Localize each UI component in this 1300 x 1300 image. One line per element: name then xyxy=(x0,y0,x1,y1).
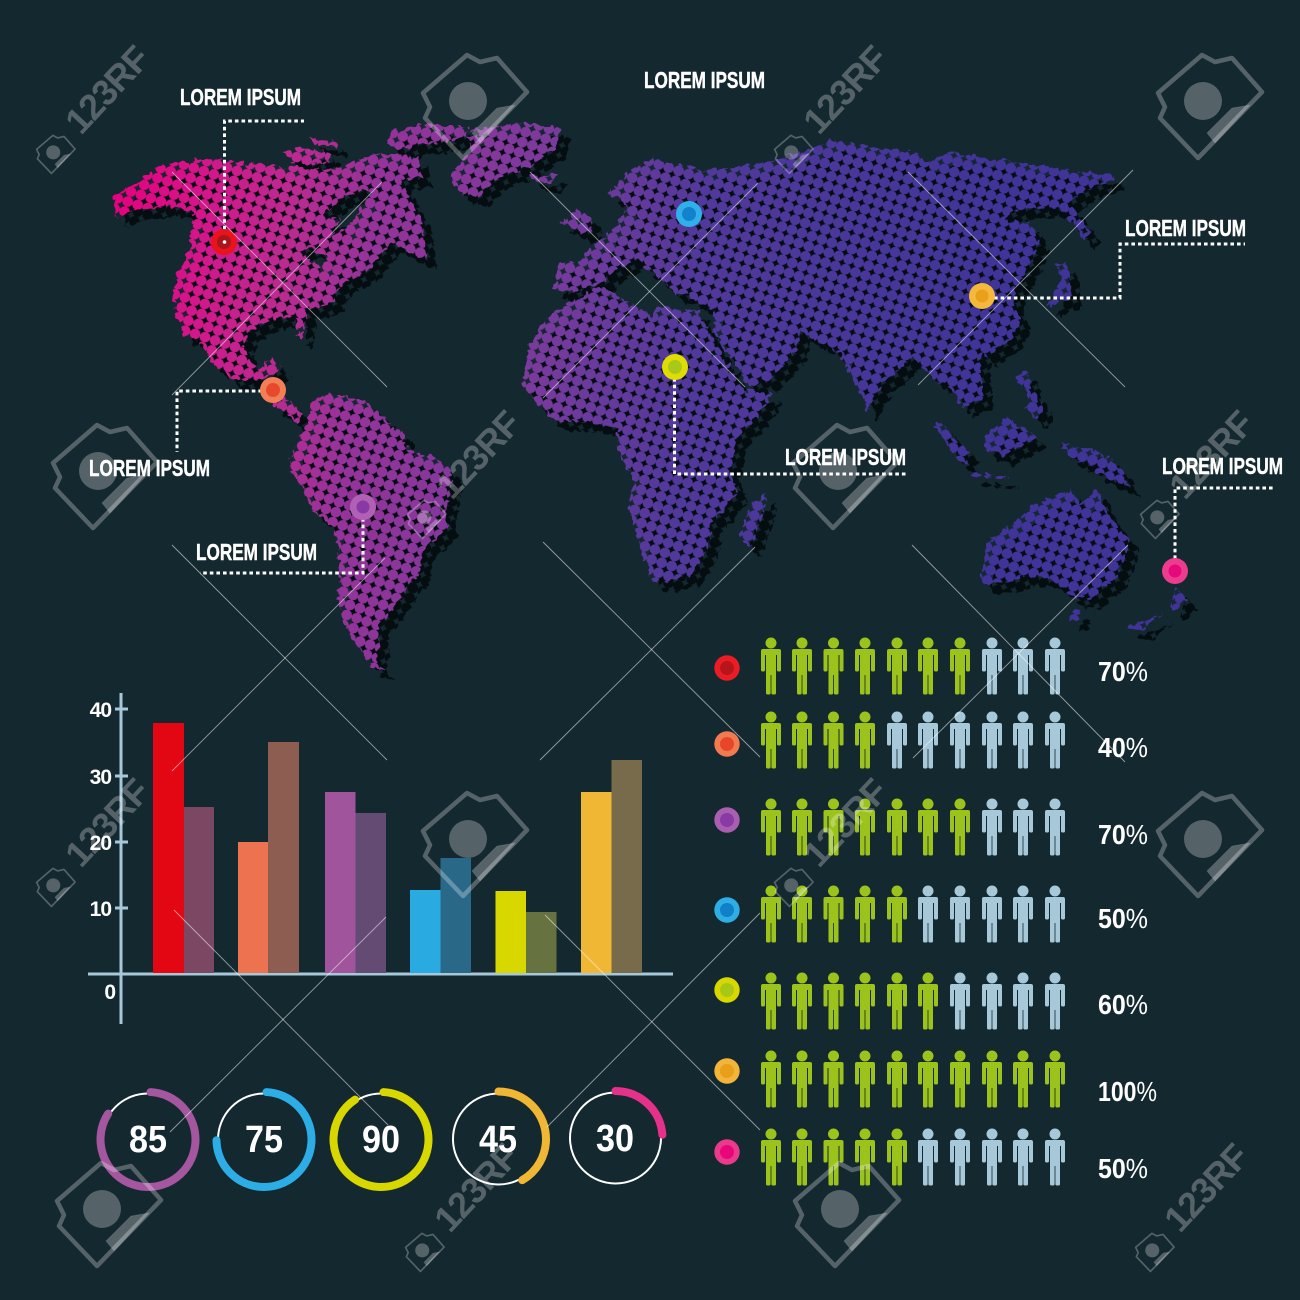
chart axes xyxy=(88,693,673,1024)
people row: red 70% xyxy=(714,638,1148,694)
people row: orange 40%: 40% xyxy=(1098,732,1148,763)
chart axis labels: 40 xyxy=(90,699,111,722)
bars: amber group xyxy=(581,760,642,973)
bars: orange group xyxy=(238,742,299,973)
callout: East Asia xyxy=(969,215,1246,309)
bars: yellow group xyxy=(496,891,556,973)
watermarks: 123RF xyxy=(795,771,895,874)
watermarks: 123RF xyxy=(57,38,157,141)
people row: yellow 60% xyxy=(714,972,1148,1030)
callout: South America xyxy=(196,494,376,573)
donut: 45 xyxy=(451,1092,546,1186)
donut: 45: 45 xyxy=(479,1119,517,1161)
callout: Central America xyxy=(89,377,286,481)
donut: 90: 90 xyxy=(362,1119,400,1161)
bars: blue group xyxy=(410,858,471,973)
bars: red group xyxy=(153,723,214,973)
donut: 90 xyxy=(331,1090,431,1189)
callout: Africa xyxy=(662,354,908,474)
people row: pink 50%: 50% xyxy=(1098,1153,1148,1184)
watermarks: 123RF xyxy=(428,403,528,506)
watermarks: 123RF xyxy=(1156,1136,1256,1239)
people row: blue 50%: 50% xyxy=(1098,903,1148,934)
chart axis labels: 20 xyxy=(90,832,111,855)
watermarks: 123RF xyxy=(57,771,157,874)
people row: red 70%: 70% xyxy=(1098,656,1148,687)
chart axis labels xyxy=(90,699,115,1004)
people row: purple 70% xyxy=(714,798,1148,856)
people row: amber 100%: 100% xyxy=(1098,1076,1157,1107)
chart axis labels: 10 xyxy=(90,898,111,921)
donut: 85: 85 xyxy=(129,1119,167,1161)
chart axis labels: 30 xyxy=(90,766,111,789)
donut: 85 xyxy=(98,1090,198,1189)
callout: Russia xyxy=(644,67,765,227)
callout: South America: LOREM IPSUM xyxy=(196,539,317,565)
callout: Oceania xyxy=(1162,453,1283,584)
donut: 30: 30 xyxy=(596,1118,634,1160)
people row: amber 100% xyxy=(714,1050,1157,1108)
people row: yellow 60%: 60% xyxy=(1098,989,1148,1020)
callout: North America: LOREM IPSUM xyxy=(180,84,301,110)
donut: 75: 75 xyxy=(245,1119,283,1161)
watermarks: 123RF xyxy=(426,1136,526,1239)
people row: purple 70%: 70% xyxy=(1098,819,1148,850)
callout: North America xyxy=(180,84,304,255)
bar chart xyxy=(88,693,673,1024)
donut: 75 xyxy=(214,1090,314,1189)
people row: pink 50% xyxy=(714,1128,1148,1186)
callout: Russia: LOREM IPSUM xyxy=(644,67,765,93)
people row: orange 40% xyxy=(714,712,1148,768)
callout: Africa: LOREM IPSUM xyxy=(785,444,906,470)
watermarks: 123RF xyxy=(1161,403,1261,506)
dotted world map xyxy=(112,122,1198,680)
people row: blue 50% xyxy=(714,886,1148,942)
callout: Central America: LOREM IPSUM xyxy=(89,455,210,481)
callout: East Asia: LOREM IPSUM xyxy=(1125,215,1246,241)
chart axis labels: 0 xyxy=(104,981,115,1004)
bars: purple group xyxy=(325,792,386,973)
watermarks: 123RF xyxy=(795,38,895,141)
donut: 30 xyxy=(568,1091,662,1185)
